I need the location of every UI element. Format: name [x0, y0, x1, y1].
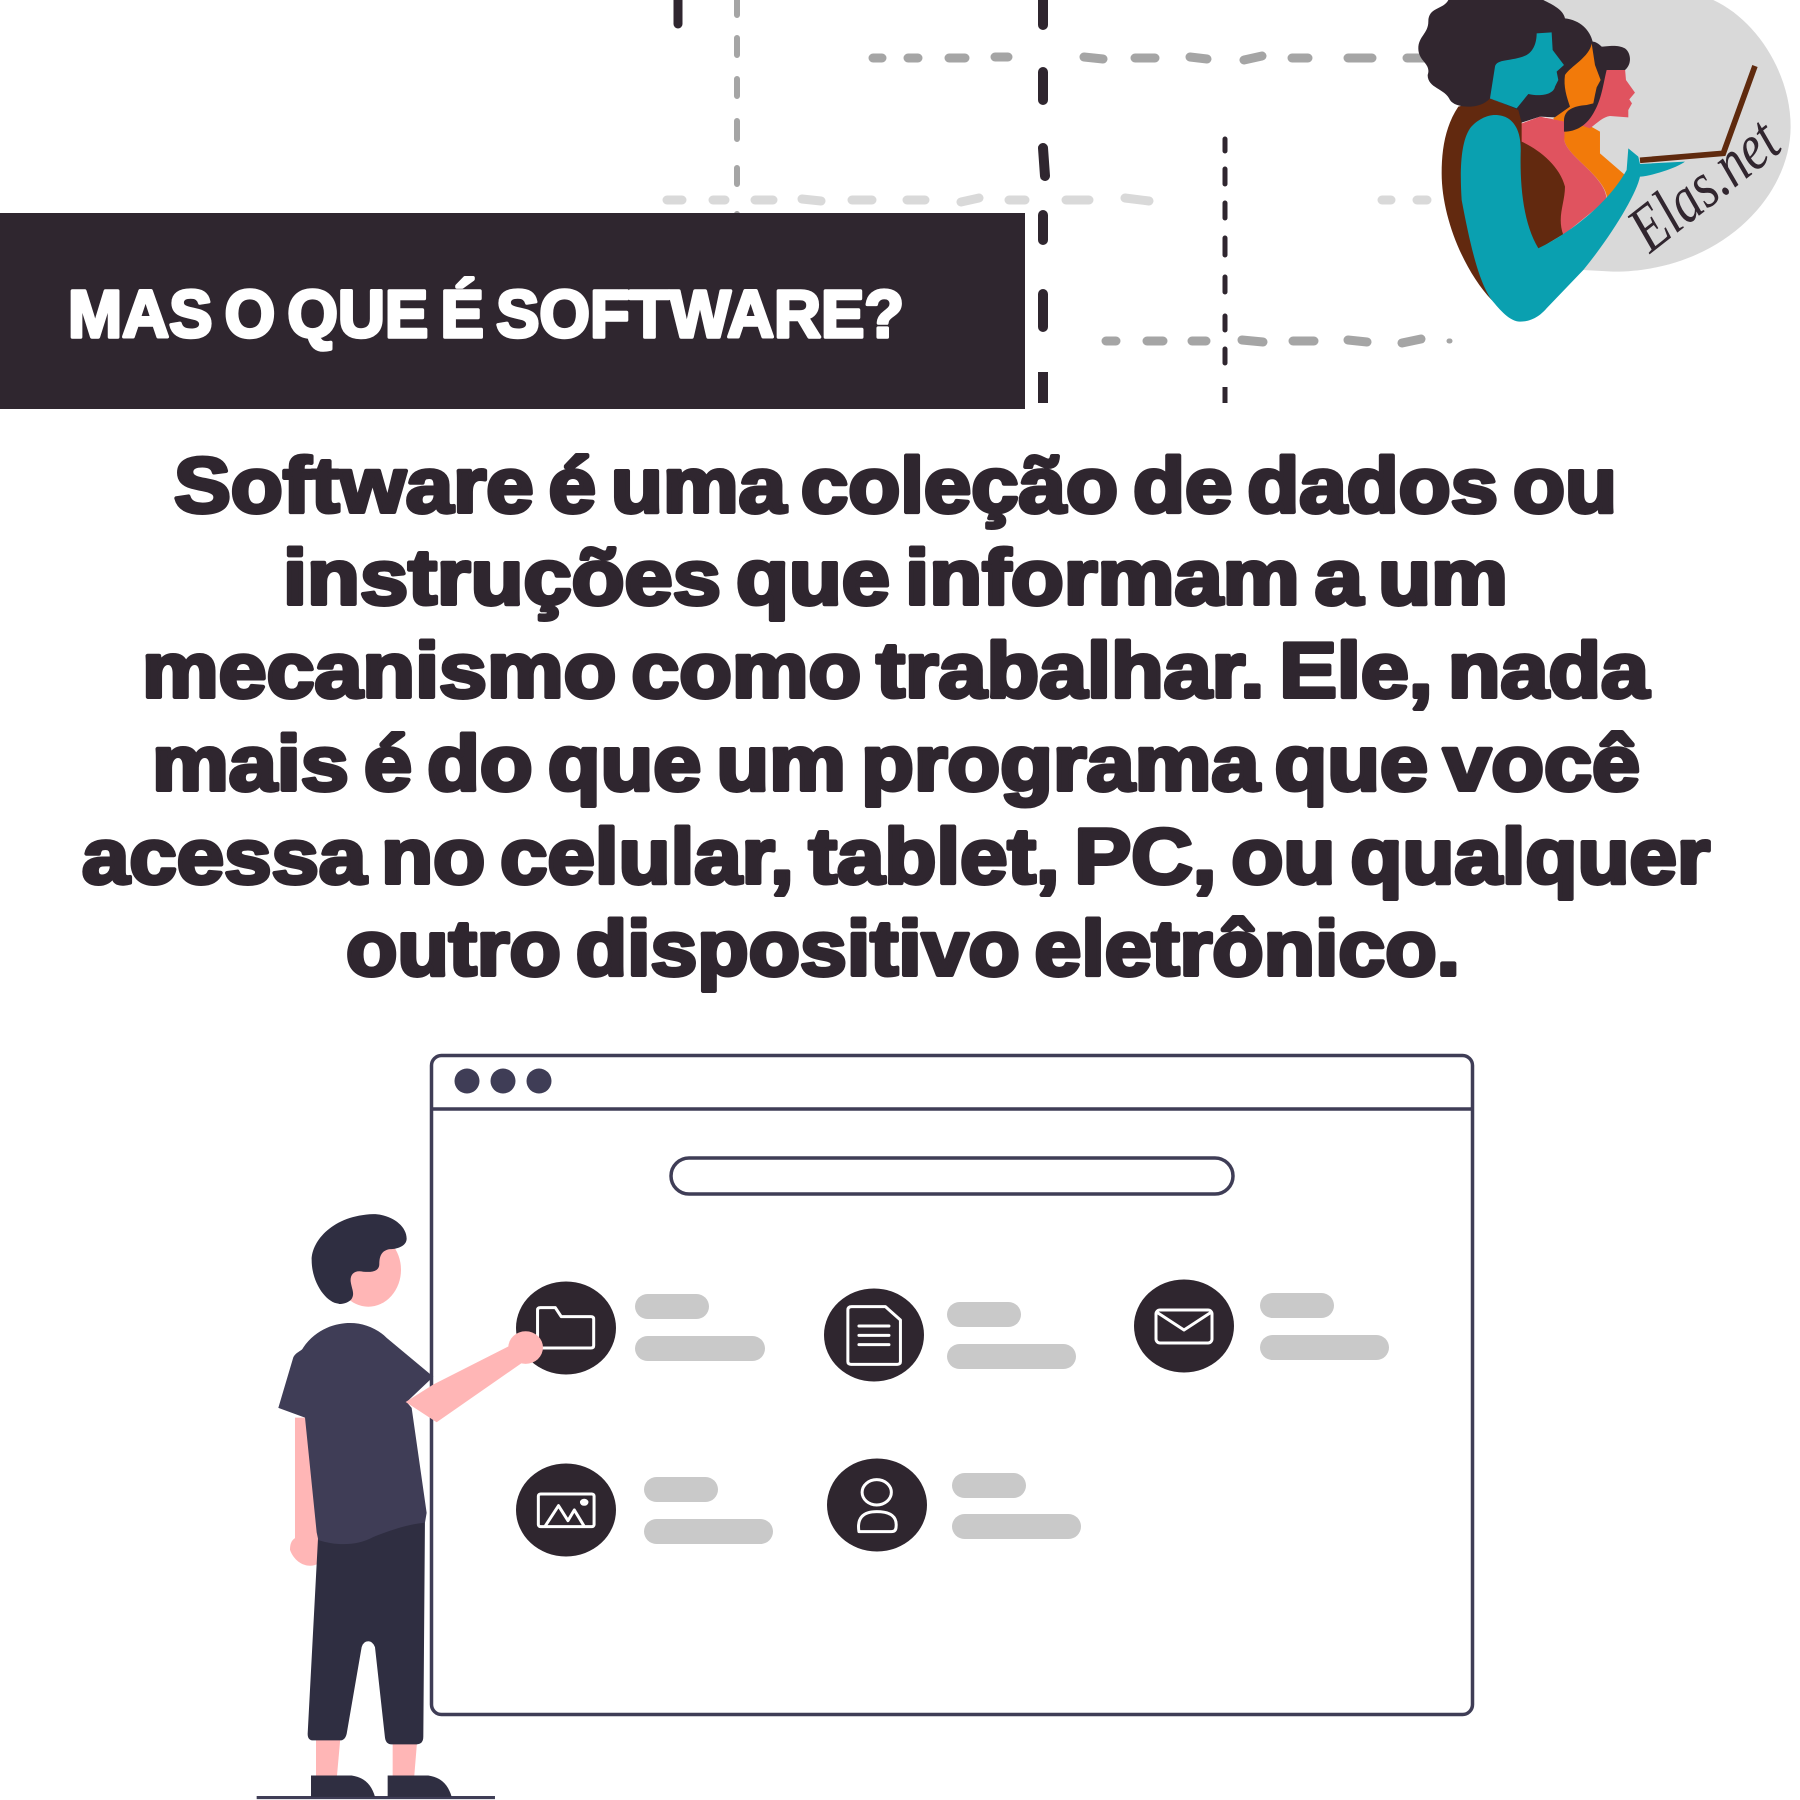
body paragraph: mecanismo como trabalhar. Ele, nada [142, 626, 1650, 714]
logo: Elas.net [1418, 0, 1794, 322]
body paragraph: outro dispositivo eletrônico. [346, 904, 1460, 992]
title banner [0, 213, 1025, 409]
search bar [671, 1158, 1233, 1194]
placeholder text: image [644, 1477, 773, 1544]
icon: mail [1134, 1280, 1234, 1372]
placeholder text: folder [635, 1294, 765, 1361]
placeholder text: mail [1260, 1293, 1389, 1360]
icon: image [516, 1464, 616, 1556]
window dots [454, 1068, 552, 1094]
browser window [431, 1056, 1473, 1714]
placeholder text: user [952, 1473, 1081, 1539]
body paragraph: Software é uma coleção de dados ou [174, 441, 1617, 529]
title text: MAS O QUE É SOFTWARE? [68, 277, 904, 352]
body paragraph: mais é do que um programa que você [152, 719, 1640, 807]
body paragraph [82, 441, 1710, 992]
placeholder text: document [947, 1302, 1076, 1369]
icon: document [824, 1288, 924, 1382]
body paragraph: acessa no celular, tablet, PC, ou qualquer [82, 812, 1710, 900]
person pointing at the screen [257, 1214, 543, 1798]
icon: folder [516, 1282, 616, 1374]
body paragraph: instruções que informam a um [283, 533, 1508, 621]
icon: user [827, 1458, 927, 1552]
